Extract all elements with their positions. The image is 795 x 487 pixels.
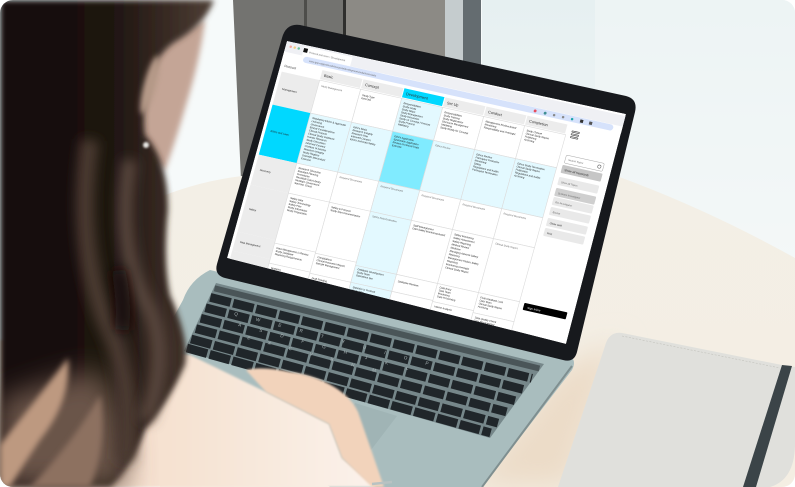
cell text: ethics row: Exercise <box>391 143 403 149</box>
column headers: Concept <box>365 83 380 90</box>
cell text: safety row: Medicine <box>450 245 462 252</box>
cell text: discovery row: Required Documents <box>503 212 527 220</box>
cell text: management row: Study Protocol <box>398 119 416 127</box>
cell text: safety row: Reporting <box>447 259 459 265</box>
cell text: data management row: Final Database Lock <box>480 295 504 304</box>
cell text: ethics row: Human Research <box>307 134 328 143</box>
cell text: last row: Study Plan <box>351 288 365 295</box>
cell text: ethics row: Conflicts of Interest <box>304 144 327 152</box>
cell text: ethics row: Scientific Misconduct <box>302 153 326 162</box>
cell text: ethics row: Participant Protection <box>475 155 500 165</box>
cell text: discovery row: Research Discovery <box>298 166 322 175</box>
cell text: safety row: Safety Terminology <box>289 199 312 208</box>
sidebar: Show all Topics <box>561 181 579 188</box>
cell text: discovery row: Strategic Governance <box>295 178 320 187</box>
key legends: QWERTYUIOP <box>234 311 447 371</box>
cell text: discovery row <box>294 167 526 220</box>
cell text: data management row: Sample Management <box>315 261 340 270</box>
row headers <box>230 72 320 268</box>
woman: hand <box>246 368 384 487</box>
protocol label: Protocol <box>284 64 297 71</box>
sidebar: Print <box>546 231 553 236</box>
cell text: data management row <box>272 246 506 313</box>
cell text: ethics row: Research Plan <box>351 131 369 139</box>
cell text: safety row: Safety Plan <box>288 202 302 209</box>
cell text: data management row: Study Team <box>356 270 370 277</box>
column headers: Set Up <box>447 101 459 108</box>
cell text: discovery row: Sanction Check <box>294 181 313 189</box>
hair: lower light strands <box>0 358 68 487</box>
row headers: Discovery <box>259 168 272 174</box>
cell text: last row: Research Data Plan <box>270 269 293 278</box>
key rows <box>187 297 532 433</box>
cell text: data management row: Data Entry <box>439 285 453 292</box>
cell text: ethics row: Licensing <box>311 119 323 125</box>
laptop screen <box>219 41 632 365</box>
column headers <box>320 70 567 133</box>
cell text: data management row: Study Database <box>275 249 294 257</box>
search box <box>564 155 604 171</box>
cell text: last row: Interim Analysis <box>434 304 453 312</box>
column headers: Development <box>406 92 429 101</box>
cell text: ethics row: Ethics Basis <box>353 125 368 132</box>
cell text: management row: Clinical Study Report <box>525 131 550 140</box>
cell text: management row: Study Goals <box>402 104 418 111</box>
cell text: data management row: Data Team <box>438 288 451 295</box>
row headers: Ethics and Laws <box>270 129 290 137</box>
base side edge <box>482 366 572 487</box>
cell text: ethics row: Research Integrity <box>352 128 374 136</box>
earring <box>143 142 149 148</box>
key legends: ZXCVBNM <box>247 335 394 378</box>
cell text: ethics row: Ethics Review <box>435 144 451 150</box>
cell text: safety row: Monitoring Oversight <box>446 262 470 271</box>
cell text: management row: Archiving <box>524 137 535 144</box>
menu icon <box>570 131 580 139</box>
laptop base <box>150 270 574 487</box>
cell text: management row: Study Management <box>321 85 343 92</box>
cell text: last row: Statistics <box>270 266 282 272</box>
cell text: management row: Study Closure <box>526 128 543 136</box>
cell text: ethics row: Ethics Application <box>394 134 415 142</box>
cell text: management row: Responsibilities <box>403 101 422 109</box>
cell text: management row: Study Type <box>362 93 376 100</box>
cell text: safety row: Safety Reporting <box>452 239 472 247</box>
sidebar <box>522 130 604 320</box>
cell text: safety row: Safety Data <box>290 196 304 203</box>
cell text: safety row: Management Patient Safety <box>447 255 480 266</box>
filter buttons <box>560 165 603 182</box>
cell text: management row: Publishing <box>524 134 537 141</box>
cell text: safety row: Clinical Study Report <box>445 265 469 274</box>
cell text: management row: Study Training <box>443 113 461 121</box>
cell text: ethics row: Ethical Considerations <box>309 125 336 135</box>
browser chrome <box>282 41 632 135</box>
trackpad <box>355 404 396 448</box>
sidebar: Sign Inline <box>527 306 541 313</box>
cell text: management row: Discourse Management <box>442 119 469 129</box>
sidebar: Show all Keywords <box>564 168 590 177</box>
cell text: safety row: Staff Management <box>413 223 434 232</box>
cell text: safety row: Study Start Documentation <box>330 208 361 219</box>
notebook elastic band <box>743 365 792 487</box>
cell text: ethics row: Clinical Study Report <box>516 164 541 173</box>
cell text: ethics row <box>301 117 545 179</box>
cell text: ethics row: Informed Consent <box>305 141 326 149</box>
table top <box>160 170 795 487</box>
cell text: ethics row: Archiving <box>514 173 525 180</box>
grid cells <box>260 80 566 352</box>
cell text: ethics row: Safety <box>473 161 482 167</box>
cell text: ethics row: Participant Termination <box>472 167 499 177</box>
hair: lower lighter tones <box>0 370 126 487</box>
background: dark pillar and window frame <box>233 0 481 180</box>
laptop lid bezel <box>216 25 636 361</box>
cell text: discovery row: Required Documents <box>462 203 486 211</box>
column headers: Completion <box>529 119 548 127</box>
cell text: ethics row: Regulatory Ethics & Approvals <box>312 116 347 127</box>
cell text: management row: Exercise <box>361 96 372 102</box>
cell text: safety row: Safety & Protocol <box>331 205 352 213</box>
browser chrome: easy-gcp-org/protocols/research/development-tools/clock-tasks <box>309 60 377 78</box>
cell text: safety row: Study Preparation <box>286 208 308 216</box>
cell text: last row <box>269 266 499 327</box>
cell text: ethics row: Informed Consent <box>350 134 372 142</box>
cell text: safety row: Reporting <box>448 252 461 258</box>
browser chrome: Protocol and more • Development <box>309 51 346 62</box>
cell text: ethics row: Research Integrity <box>303 147 325 155</box>
row headers: Safety <box>249 207 257 212</box>
cell text: safety row: Safety Assessment <box>453 236 475 244</box>
cell text: ethics row: Clinical Study Guidance <box>308 131 336 141</box>
column headers: Conduct <box>488 110 503 117</box>
cell text: management row: Validating <box>441 122 453 129</box>
cell text: data management row: Operations Set <box>355 273 373 281</box>
cell text: management row: Responsibility and Oversight <box>483 125 516 136</box>
cell text: ethics row: Exercise <box>301 156 312 162</box>
cell text: last row: Data Quality Check <box>474 315 498 324</box>
cell text: data management row: Database Development <box>357 267 384 277</box>
cell text: management row: Management Review Board <box>485 119 517 130</box>
sidebar: Bio Investigator <box>555 201 573 208</box>
cell text: discovery row: Required Documents <box>380 185 404 193</box>
cell text: data management row: Clinical Document Report <box>316 258 346 268</box>
table wood patch <box>484 345 604 487</box>
cell text: ethics row: Monitoring <box>474 158 488 165</box>
cell text: discovery row: Required Documents <box>339 176 363 184</box>
cell text: discovery row: Standard Planning <box>297 169 319 177</box>
cell text: ethics row: Governance <box>310 122 325 129</box>
cell text: management row: Study Registration <box>442 116 464 125</box>
cell text: data management row: Data Team <box>479 298 492 305</box>
cell text: management row: Study Management <box>401 110 423 119</box>
cell text: ethics row: Study Discussion <box>306 138 327 146</box>
watch cuff <box>372 482 392 484</box>
cell text: data management row: Data Processing <box>437 294 457 302</box>
cell text: ethics row: Ethics Study Termination <box>517 161 546 171</box>
cell text: safety row: Study Information <box>287 205 308 213</box>
cell text: safety row <box>287 197 518 274</box>
woman: neck and cheek <box>130 20 205 170</box>
woman: hair <box>0 0 214 487</box>
cell text: safety row: Data Safety Monitoring Board <box>412 226 446 237</box>
cell text: safety row: Safety Monitoring <box>454 232 475 241</box>
row headers: Management <box>282 87 298 94</box>
cell text: ethics row: Regulations and Audits <box>473 164 500 174</box>
cell text: management row <box>321 85 549 143</box>
sidebar: Systems Investigator <box>558 192 581 200</box>
cell text: management row: Study Discussion <box>400 113 420 121</box>
cell text: data management row: Database Reviews <box>397 279 420 288</box>
cell text: safety row: Clinical Study Report <box>495 242 518 250</box>
key legends: ASDFGHJKL <box>238 322 427 376</box>
cell text: discovery row: Reusable Data Library <box>296 175 322 184</box>
cell text: ethics row: Ethics and Data Safety <box>350 137 377 147</box>
sign in button <box>523 303 568 319</box>
woman: shirt <box>0 340 376 487</box>
cell text: data management row: Data Management in Review <box>276 246 309 257</box>
sidebar: Search Topics <box>568 159 584 165</box>
cell text: ethics row: Study Registry <box>303 150 320 158</box>
cell text: data management row: Reporting Requirements <box>274 252 303 262</box>
cell text: safety row: Safety Data Evaluation <box>372 215 398 223</box>
cell text: management row: Study Or Concept / Process <box>399 116 431 127</box>
sidebar: Biostat <box>552 211 561 216</box>
cell text: safety row: Medical Review <box>451 242 470 250</box>
notebook <box>558 333 795 487</box>
cell text: ethics row: Review of Clinical Trials <box>392 140 420 150</box>
cell text: safety row: Managing Adverse Safety <box>449 249 479 259</box>
row headers: Data Management <box>239 240 261 248</box>
cell text: discovery row: Required Documents <box>421 194 445 202</box>
cell text: ethics row: Ethics Review <box>476 152 493 160</box>
cell text: management row: Study Ready for Concept <box>440 125 469 135</box>
column headers: Basic <box>324 74 334 80</box>
cell text: last row: Data Management <box>474 318 495 327</box>
cell text: discovery row: Procedures <box>296 172 311 179</box>
cell text: last row: Draft Reading <box>311 276 328 283</box>
sidebar: Clean Grid <box>549 221 563 228</box>
cell text: ethics row: Publication <box>515 167 529 174</box>
cell text: management row: Validating <box>397 122 410 128</box>
cell text: management row: Responsibilities <box>444 110 463 118</box>
cell text: management row: Monitoring <box>484 122 497 129</box>
cell text: ethics row: Systematic Application <box>393 137 420 147</box>
touch bar <box>214 288 539 368</box>
cell text: ethics row: Regulations and Audits <box>514 170 542 180</box>
cell text: data management row: Archiving <box>477 304 489 311</box>
cell text: last row: Statistics in Protocol <box>352 285 376 294</box>
keyboard <box>184 283 544 438</box>
cell text: data management row: Clinical Study Report <box>478 301 503 310</box>
cell text: management row: Study Steps <box>401 107 417 114</box>
cell text: ethics row: Clinical Protocol <box>309 128 328 136</box>
cell text: data management row: Compilations <box>317 255 333 262</box>
background: window <box>168 0 795 258</box>
ear <box>136 54 164 116</box>
cell text: data management row: Monitoring <box>437 291 451 298</box>
